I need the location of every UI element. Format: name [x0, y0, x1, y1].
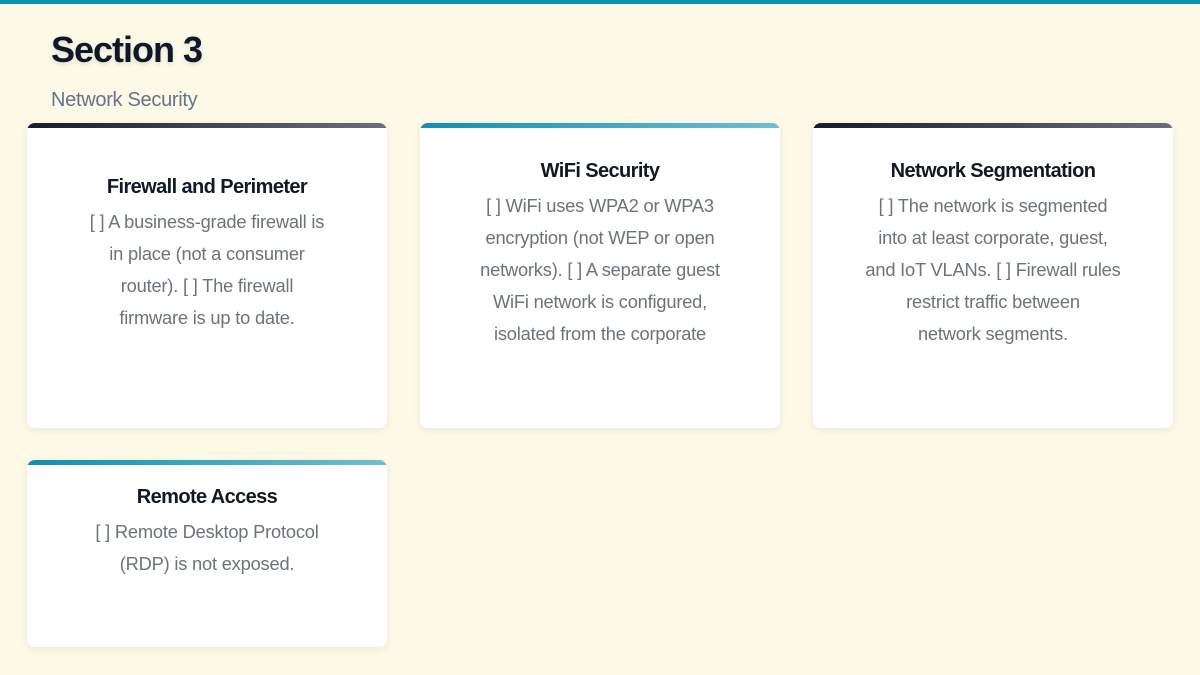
- text: wifi: networks). [ ] A separate guest: [480, 258, 720, 280]
- text: firewall: [90, 210, 324, 328]
- text: remote access: (RDP) is not exposed.: [120, 552, 294, 574]
- text: firewall: router). [ ] The firewall: [121, 274, 293, 296]
- text: segmentation: [865, 194, 1121, 344]
- title: Section 3: [51, 29, 202, 70]
- text: wifi: encryption (not WEP or open: [486, 226, 714, 248]
- panel: remote access: [27, 460, 387, 647]
- text: wifi: isolated from the corporate: [494, 322, 706, 344]
- heading: remote access: Remote Access: [137, 486, 277, 508]
- panel: wifi: [420, 123, 780, 428]
- text: segmentation: and IoT VLANs. [ ] Firewall rules: [865, 258, 1121, 280]
- text: wifi: WiFi network is configured,: [493, 290, 707, 312]
- text: segmentation: [ ] The network is segmented: [879, 194, 1107, 216]
- panel: firewall: [27, 123, 387, 428]
- text: segmentation: network segments.: [918, 322, 1068, 344]
- heading: wifi: WiFi Security: [541, 160, 659, 182]
- text: firewall: in place (not a consumer: [109, 242, 305, 264]
- text: segmentation: restrict traffic between: [906, 290, 1080, 312]
- text: remote access: [95, 520, 319, 574]
- text: segmentation: into at least corporate, guest,: [878, 226, 1108, 248]
- text: wifi: [ ] WiFi uses WPA2 or WPA3: [486, 194, 714, 216]
- text: firewall: firmware is up to date.: [119, 306, 295, 328]
- heading: segmentation: Network Segmentation: [891, 160, 1095, 182]
- text: firewall: [ ] A business-grade firewall is: [90, 210, 324, 232]
- text: wifi: [480, 194, 720, 344]
- subtitle: Network Security: [51, 89, 197, 111]
- heading: firewall: Firewall and Perimeter: [107, 176, 307, 198]
- text: remote access: [ ] Remote Desktop Protocol: [95, 520, 319, 542]
- panel: segmentation: [813, 123, 1173, 428]
